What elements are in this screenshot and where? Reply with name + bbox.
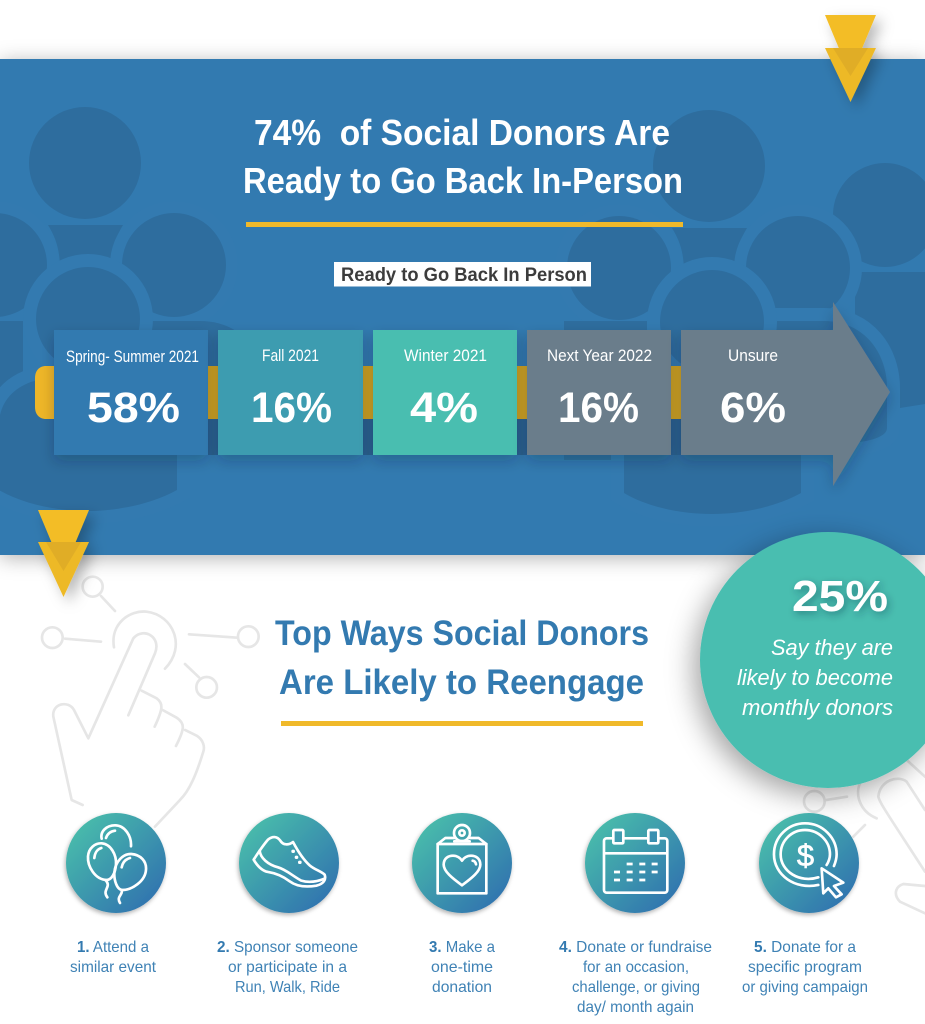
arrow box: unsure: 6% xyxy=(720,384,786,432)
box: fall 2021 xyxy=(218,330,363,455)
label: day/ month again xyxy=(577,999,694,1016)
icon: faint pointing hand, right xyxy=(804,760,925,913)
label xyxy=(742,939,868,996)
label: challenge, or giving xyxy=(572,979,700,996)
box: spring-summer 2021: Spring- Summer 2021 xyxy=(66,348,199,366)
label: 3. Make a xyxy=(429,939,495,956)
heading: top ways to reengage: Top Ways Social Donors xyxy=(275,614,649,653)
label: similar event xyxy=(70,959,157,976)
heading: 74% of social donors: 74% of Social Donors Are xyxy=(254,112,670,153)
label: 1. Attend a xyxy=(77,939,149,956)
banner: in-person section xyxy=(0,59,925,555)
heading: top ways to reengage: Are Likely to Reengage xyxy=(279,663,644,702)
icon: balloons xyxy=(66,813,166,913)
box: fall 2021: Fall 2021 xyxy=(262,347,319,365)
box: fall 2021: 16% xyxy=(251,384,332,432)
callout: 25% monthly donors: monthly donors xyxy=(742,695,893,720)
callout: 25% monthly donors xyxy=(700,532,925,788)
callout: 25% monthly donors: Say they are xyxy=(771,635,893,660)
heading underline xyxy=(246,222,683,227)
label: or giving campaign xyxy=(742,979,868,996)
box: next year 2022: 16% xyxy=(558,384,639,432)
box: winter 2021: 4% xyxy=(410,384,478,432)
item 2: sponsor or participate xyxy=(217,813,358,996)
icon: top-right yellow arrow xyxy=(825,15,876,102)
label: donation xyxy=(432,979,492,996)
timeline arrow chart xyxy=(35,302,890,486)
icon: running shoe xyxy=(239,813,339,913)
arrow box: unsure xyxy=(681,302,890,486)
connector band xyxy=(35,366,681,455)
background crowd: far right figure xyxy=(833,163,925,408)
item 1: attend a similar event xyxy=(66,813,166,976)
icon: bottom-left yellow arrow xyxy=(38,510,89,597)
label xyxy=(70,939,157,976)
label: specific program xyxy=(748,959,862,976)
icon: faint pointing hand, left xyxy=(42,577,259,827)
label: one-time xyxy=(431,959,493,976)
label xyxy=(559,939,712,1016)
chart label: ready to go back in person: Ready to Go Back In Person xyxy=(341,265,587,286)
label xyxy=(217,939,358,996)
label: or participate in a xyxy=(228,959,347,976)
icon: dollar coin with cursor: $ xyxy=(797,838,814,873)
box: spring-summer 2021 xyxy=(54,330,208,455)
label: 4. Donate or fundraise xyxy=(559,939,712,956)
box: next year 2022 xyxy=(527,330,671,455)
label: for an occasion, xyxy=(583,959,689,976)
label xyxy=(429,939,495,996)
callout: 25% monthly donors: likely to become xyxy=(737,665,893,690)
box: spring-summer 2021: 58% xyxy=(87,384,180,432)
arrow box: unsure: Unsure xyxy=(728,347,778,365)
box: winter 2021 xyxy=(373,330,517,455)
label: 5. Donate for a xyxy=(754,939,856,956)
icon: calendar xyxy=(585,813,685,913)
section underline xyxy=(281,721,643,726)
heading: 74% of social donors: Ready to Go Back In-Person xyxy=(243,160,683,201)
icon: dollar coin with cursor xyxy=(759,813,859,913)
callout: 25% monthly donors: 25% xyxy=(792,572,888,621)
item 5: specific program xyxy=(742,813,868,996)
heading: 74% of social donors xyxy=(243,112,683,201)
heading: top ways to reengage xyxy=(275,614,649,702)
box: next year 2022: Next Year 2022 xyxy=(547,347,652,365)
icon: donation box with heart xyxy=(412,813,512,913)
label: 2. Sponsor someone xyxy=(217,939,358,956)
background crowd: right group xyxy=(555,110,887,514)
label: Run, Walk, Ride xyxy=(235,979,340,996)
background crowd: left group xyxy=(0,107,263,511)
box: winter 2021: Winter 2021 xyxy=(404,347,487,365)
item 3: one-time donation xyxy=(412,813,512,996)
item 4: occasion fundraise xyxy=(559,813,712,1016)
